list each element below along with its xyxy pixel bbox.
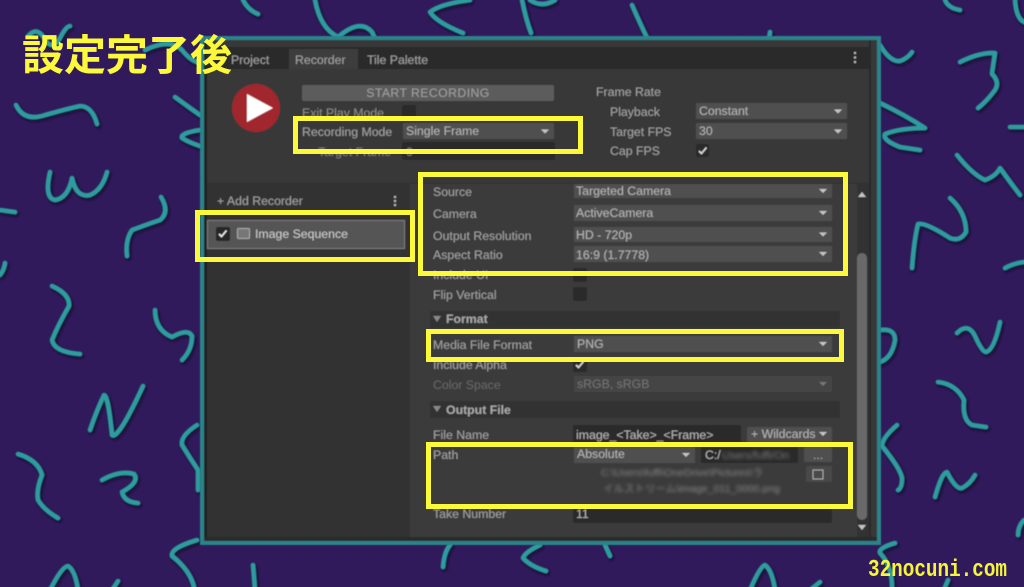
highlight: source settings bbox=[420, 174, 846, 274]
output file section: 11 bbox=[576, 507, 589, 521]
highlight: recording mode bbox=[296, 118, 580, 152]
input settings: ActiveCamera bbox=[576, 206, 653, 220]
tab bar: Project bbox=[231, 53, 270, 67]
output file section: image_<Take>_<Frame> bbox=[576, 428, 713, 442]
output file section: ... bbox=[813, 448, 823, 462]
input settings: Output Resolution bbox=[433, 229, 532, 243]
recording settings: Single Frame bbox=[406, 124, 479, 138]
output file section: Output File bbox=[446, 403, 511, 417]
icon: record play button bbox=[232, 84, 280, 132]
panel: recorder list bbox=[207, 184, 410, 537]
recording settings: Recording Mode bbox=[302, 125, 392, 139]
output file section: イルストリーム\image_011_0000.png bbox=[603, 483, 780, 495]
input settings: Camera bbox=[433, 207, 477, 221]
start recording button bbox=[302, 85, 554, 101]
tab bar: Recorder bbox=[295, 53, 346, 67]
format section: Color Space bbox=[433, 378, 501, 392]
output file section: File Name bbox=[433, 428, 489, 442]
scrollbar bbox=[857, 184, 869, 537]
input settings: Source bbox=[433, 185, 472, 199]
recording settings bbox=[302, 105, 555, 160]
input settings: Aspect Ratio bbox=[433, 248, 503, 262]
frame rate settings: Constant bbox=[699, 104, 749, 118]
image sequence row: Image Sequence bbox=[255, 227, 348, 241]
highlight: media file format bbox=[428, 332, 842, 360]
output file section bbox=[430, 401, 840, 523]
format section: Include Alpha bbox=[433, 358, 507, 372]
input settings: HD - 720p bbox=[576, 228, 632, 242]
start recording button: START RECORDING bbox=[366, 86, 490, 100]
output file section: Take Number bbox=[433, 507, 506, 521]
Unity Recorder window bbox=[202, 38, 879, 543]
frame rate settings: Playback bbox=[610, 105, 661, 119]
input settings bbox=[433, 184, 832, 302]
output file section: Path bbox=[433, 448, 458, 462]
output file section: Absolute bbox=[577, 447, 625, 461]
output file section: Users/fuffi/On bbox=[722, 450, 789, 462]
panel: recorder list: + Add Recorder bbox=[217, 194, 303, 208]
output file section: + Wildcards bbox=[751, 427, 816, 441]
format section: sRGB, sRGB bbox=[577, 377, 649, 391]
title: 設定完了後 bbox=[22, 32, 232, 79]
frame rate settings: Cap FPS bbox=[610, 144, 660, 158]
tab bar: Tile Palette bbox=[367, 53, 428, 67]
input settings: Targeted Camera bbox=[576, 184, 671, 198]
window frame bbox=[202, 38, 879, 543]
frame rate settings bbox=[596, 85, 847, 158]
input settings: Include UI bbox=[433, 268, 488, 282]
recording settings: Target Frame bbox=[318, 145, 391, 159]
highlight: output path bbox=[428, 444, 850, 506]
frame rate settings: 30 bbox=[699, 124, 713, 138]
format section: PNG bbox=[577, 337, 604, 351]
frame rate settings: Target FPS bbox=[610, 125, 672, 139]
recording settings: 0 bbox=[406, 145, 413, 159]
highlight: image sequence bbox=[198, 212, 412, 260]
panel: recorder settings bbox=[207, 183, 869, 537]
tab bar bbox=[207, 47, 869, 69]
recording settings: Exit Play Mode bbox=[302, 106, 384, 120]
input settings: 16:9 (1.7778) bbox=[576, 248, 649, 262]
image sequence row bbox=[208, 220, 404, 248]
frame rate settings: Frame Rate bbox=[596, 85, 661, 99]
input settings: Flip Vertical bbox=[433, 288, 497, 302]
output file section: C:/ bbox=[705, 448, 721, 462]
output file section: C:\Users\fuffi\OneDrive\Pictures\ラ bbox=[601, 467, 763, 479]
format section: Media File Format bbox=[433, 338, 533, 352]
format section: Format bbox=[446, 312, 488, 326]
format section bbox=[430, 311, 840, 392]
